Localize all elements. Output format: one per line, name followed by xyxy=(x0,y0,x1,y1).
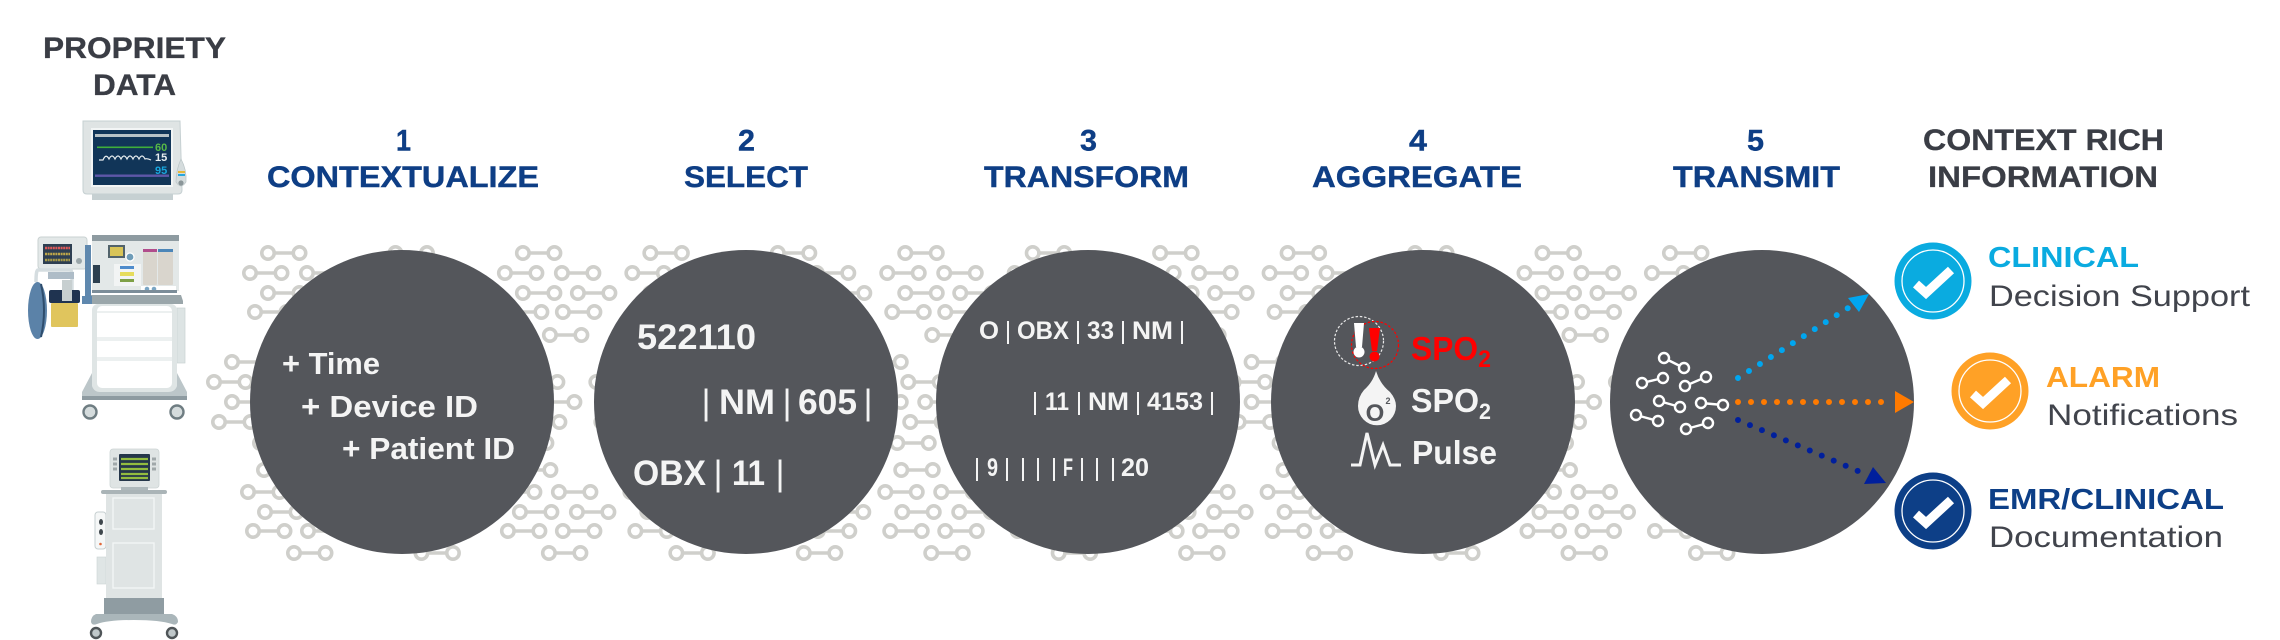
icon: anesthesia machine xyxy=(28,235,187,418)
step 2: select xyxy=(594,124,898,554)
step 1 heading xyxy=(267,124,539,194)
circle 2 text: 605 xyxy=(798,383,857,422)
circle 3 text: O xyxy=(979,317,999,345)
alarm label: ALARM xyxy=(2046,362,2160,394)
circle 3 text: | xyxy=(1110,454,1116,482)
circle 3 text: 9 xyxy=(987,454,998,482)
step 3: transform xyxy=(936,124,1240,554)
clinical label: CLINICAL xyxy=(1988,242,2139,274)
output: alarm notifications xyxy=(1952,352,2238,432)
circle 1 text: + Device ID xyxy=(301,389,478,424)
circle 2 text: | xyxy=(775,454,785,493)
background circuit pattern xyxy=(208,247,1763,559)
icon: navy check badge xyxy=(1894,472,1972,550)
step 5 heading: 5 xyxy=(1747,124,1764,158)
circle 4 xyxy=(1271,250,1575,554)
EMR clinical label: EMR/CLINICAL xyxy=(1988,484,2224,516)
upper unit xyxy=(88,235,183,304)
icon: patient monitor: 15 xyxy=(155,152,167,164)
circle 3 text: | xyxy=(1209,388,1215,416)
circle 2 text: | xyxy=(782,383,792,422)
circle 2 text: | xyxy=(701,383,711,422)
circle 3 text: NM xyxy=(1132,317,1173,345)
step 3 heading xyxy=(984,124,1189,194)
heading: propriety data: PROPRIETY xyxy=(43,32,226,65)
step 5: transmit xyxy=(1610,124,1914,554)
icon: patient monitor xyxy=(83,121,186,200)
arrow: to EMR xyxy=(1738,420,1886,484)
circle 3 text: | xyxy=(1075,317,1081,345)
icon: pulse wave xyxy=(1351,433,1401,465)
icon: ventilator cart xyxy=(91,449,178,638)
circle 3 text: 4153 xyxy=(1147,388,1203,416)
icon: orange check badge xyxy=(1952,352,2028,430)
icon: blue check badge xyxy=(1894,242,1972,320)
white SPO2 label: SPO xyxy=(1411,382,1481,419)
circle 3 text: | xyxy=(1079,454,1085,482)
side monitor xyxy=(38,237,92,304)
circle 3 text: OBX xyxy=(1017,317,1069,345)
step 5 heading: TRANSMIT xyxy=(1673,161,1840,194)
circle 3 text: | xyxy=(1051,454,1057,482)
heading: context rich information: CONTEXT RICH xyxy=(1923,124,2164,157)
heading: context rich information xyxy=(1923,124,2164,194)
circle 2 text: OBX xyxy=(633,454,707,493)
circle 3 text: NM xyxy=(1088,388,1129,416)
circle 3 text: | xyxy=(974,454,980,482)
icon: data nodes xyxy=(1631,353,1728,434)
circle 3 text: | xyxy=(1035,454,1041,482)
circle 3 text: F xyxy=(1063,454,1073,482)
icon: oxygen drop: O xyxy=(1366,400,1384,427)
step 4 heading: 4 xyxy=(1409,124,1427,158)
icon: double alarm xyxy=(1334,316,1398,368)
circle 1 text: + Patient ID xyxy=(342,431,515,466)
pulse label: Pulse xyxy=(1412,434,1497,471)
step 4 heading: AGGREGATE xyxy=(1312,161,1522,194)
circle 3 xyxy=(936,250,1240,554)
circle 2 text: NM xyxy=(719,383,775,422)
circle 3 text xyxy=(974,317,1215,482)
documentation label: Documentation xyxy=(1989,521,2223,554)
circle 5 xyxy=(1610,250,1914,554)
step 5 heading xyxy=(1673,124,1840,194)
output: clinical decision support xyxy=(1894,242,2251,320)
icon: patient monitor: 95 xyxy=(155,165,167,177)
circle 2 text: | xyxy=(713,454,723,493)
breathing bag and canister xyxy=(28,270,80,339)
circle 3 text: | xyxy=(1005,317,1011,345)
step 4: aggregate xyxy=(1271,124,1575,554)
heading: propriety data: DATA xyxy=(93,69,176,102)
circle 2 text xyxy=(633,318,873,493)
step 2 heading: SELECT xyxy=(684,161,808,194)
step 1 heading: CONTEXTUALIZE xyxy=(267,161,539,194)
icon: oxygen drop: 2 xyxy=(1385,396,1391,406)
circle 3 text: | xyxy=(1120,317,1126,345)
cabinet xyxy=(82,304,187,418)
step 4 heading xyxy=(1312,124,1522,194)
icon: patient monitor: 60 xyxy=(155,142,167,154)
circle 2 text: 522110 xyxy=(637,318,756,357)
circle 2 xyxy=(594,250,898,554)
circle 3 text: | xyxy=(1020,454,1026,482)
arrow: to clinical xyxy=(1738,294,1869,378)
heading: context rich information: INFORMATION xyxy=(1928,161,2158,194)
step 2 heading xyxy=(684,124,808,194)
circle 3 text: | xyxy=(1135,388,1141,416)
circle 3 text: | xyxy=(1179,317,1185,345)
arrow: to alarm xyxy=(1738,391,1914,413)
circle 3 text: | xyxy=(1032,388,1038,416)
step 1: contextualize xyxy=(250,124,554,554)
notifications label: Notifications xyxy=(2047,399,2238,432)
step 3 heading: 3 xyxy=(1080,124,1097,158)
circle 3 text: 33 xyxy=(1087,317,1114,345)
step 1 heading: 1 xyxy=(396,124,411,158)
red SPO2 label: 2 xyxy=(1478,346,1491,373)
circle 2 text: | xyxy=(863,383,873,422)
circle 1 text: + Time xyxy=(282,346,380,381)
red SPO2 label: SPO xyxy=(1411,330,1481,367)
white SPO2 label: 2 xyxy=(1479,399,1491,424)
output: EMR clinical documentation xyxy=(1894,472,2224,554)
heading: propriety data xyxy=(43,32,226,102)
circle 3 text: | xyxy=(1076,388,1082,416)
circle 1 text xyxy=(282,346,515,466)
circle 3 text: | xyxy=(1004,454,1010,482)
circle 2 text: 11 xyxy=(732,454,765,493)
decision support label: Decision Support xyxy=(1989,280,2251,313)
icon: oxygen drop xyxy=(1358,371,1396,427)
circle 3 text: 11 xyxy=(1045,388,1069,416)
step 3 heading: TRANSFORM xyxy=(984,161,1189,194)
circle 3 text: | xyxy=(1094,454,1100,482)
circle 3 text: 20 xyxy=(1121,454,1149,482)
circle 1 xyxy=(250,250,554,554)
step 2 heading: 2 xyxy=(738,124,755,158)
